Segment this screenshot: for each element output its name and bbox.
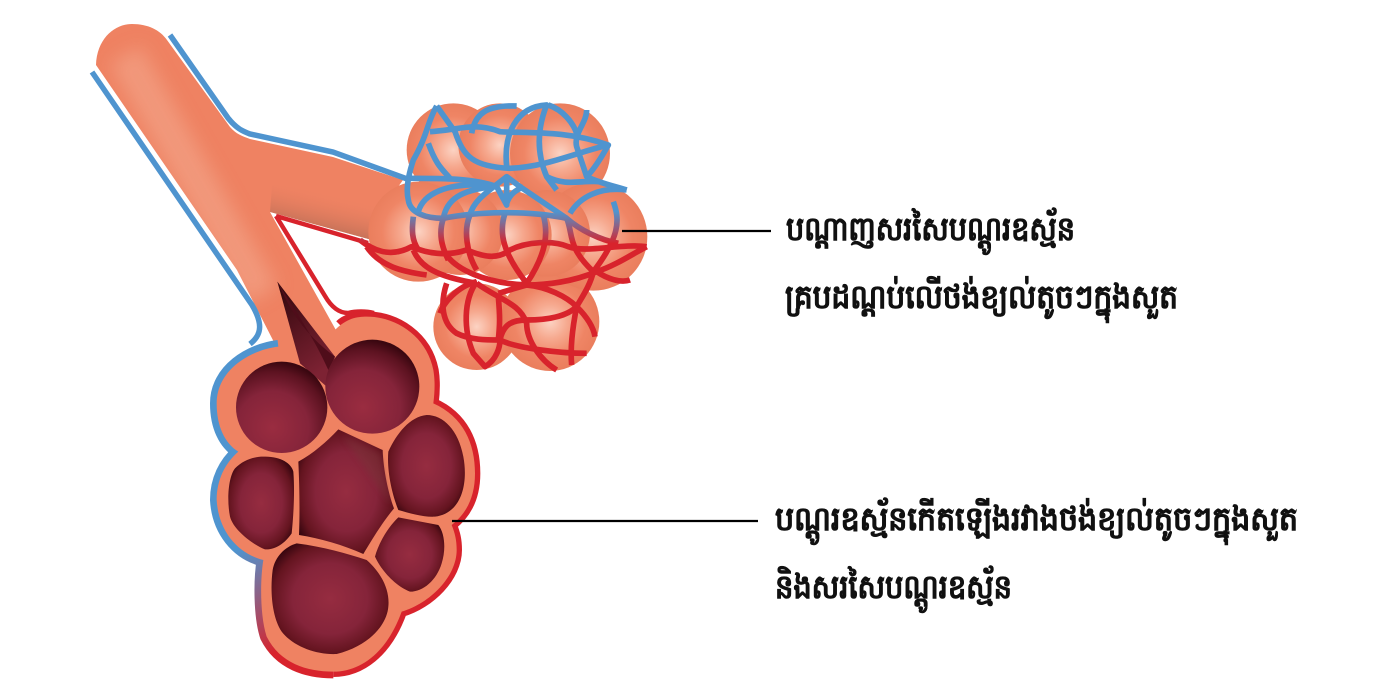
tube highlight and branch shading bbox=[125, 55, 385, 295]
label line 4: និងសរសៃបណ្តូរឧស្ម័ន bbox=[775, 565, 1012, 614]
tube body bbox=[96, 24, 403, 350]
outer red edge bbox=[333, 317, 475, 672]
chamber left bbox=[228, 457, 294, 549]
leader line bbox=[622, 230, 771, 232]
leader line bbox=[452, 520, 758, 522]
label line 2: គ្របដណ្តប់លើថង់ខ្យល់តូចៗក្នុងសួត bbox=[785, 276, 1178, 324]
chamber top left bbox=[236, 362, 327, 453]
chamber bottom bbox=[272, 543, 389, 654]
duct opening bbox=[277, 282, 335, 387]
blue vessel right bbox=[170, 35, 410, 180]
label line 3: បណ្តូរឧស្ម័នកើតឡើងរវាងថង់ខ្យល់តូចៗក្នុងសួត bbox=[775, 497, 1298, 546]
alveoli spheres bbox=[368, 103, 647, 371]
airway tube with branch bbox=[92, 24, 410, 350]
callout: capillary network bbox=[622, 207, 1178, 324]
sac wall bbox=[217, 303, 475, 672]
chamber lower right bbox=[375, 517, 444, 592]
chamber right bbox=[388, 415, 465, 517]
blue vessel left bbox=[92, 72, 260, 344]
outer blue edge bbox=[217, 347, 333, 672]
red vessel branch bbox=[276, 216, 374, 313]
upper alveolar cluster with capillaries bbox=[360, 103, 647, 371]
callout: gas exchange bbox=[452, 497, 1298, 614]
capillary network bbox=[360, 105, 647, 370]
chamber top right bbox=[325, 340, 419, 434]
label line 1: បណ្តាញសរសៃបណ្តូរឧស្ម័ន bbox=[786, 207, 1075, 256]
lower alveolar sac cross-section bbox=[217, 282, 475, 672]
chamber middle bbox=[298, 429, 394, 554]
